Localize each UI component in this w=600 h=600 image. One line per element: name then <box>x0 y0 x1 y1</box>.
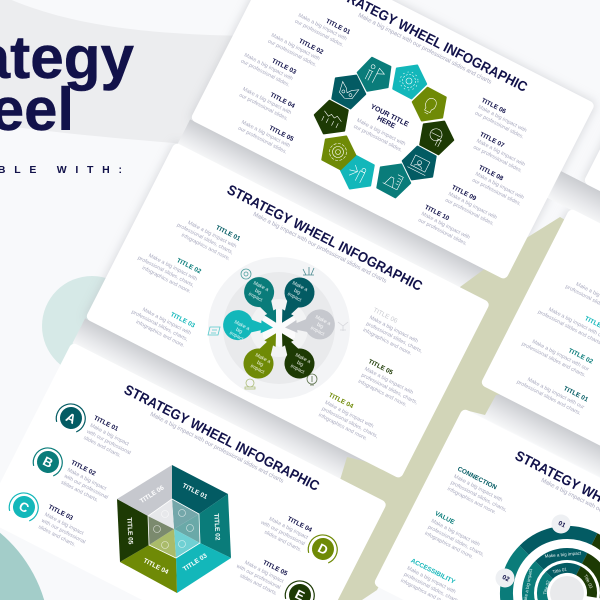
slide text: Make a big impact with <box>477 104 528 134</box>
petal labels: Make a <box>254 352 272 365</box>
slide text: STRATEGY WHEEL INFOGRAPHIC <box>122 381 322 494</box>
slide text: TITLE 09 <box>450 184 478 203</box>
petal labels: impact <box>309 325 326 338</box>
slide text: TITLE 02 <box>175 257 203 276</box>
slide text: Make a big impact with <box>363 366 414 396</box>
slide text: with our professional <box>235 563 281 591</box>
letter badges: D <box>315 540 331 558</box>
slide text: Make a big impact with <box>270 32 321 62</box>
slide text: infographics and more. <box>357 379 408 408</box>
petal labels: impact <box>289 363 306 376</box>
slide text: Make a big impact with <box>474 171 525 201</box>
slide text <box>212 0 573 261</box>
slide text: Make a big impact <box>43 512 85 537</box>
slide text: CONNECTION <box>456 466 498 492</box>
slide text: professional slides, charts, <box>360 372 418 406</box>
slide text: our professional slides. <box>472 144 523 174</box>
slide text: Make a big impact with our <box>531 339 590 373</box>
slide text: TITLE 03 <box>270 58 298 76</box>
slide text: Make a big impact with <box>356 118 406 147</box>
slide text: with our professional <box>63 473 109 501</box>
slide text: TITLE 05 <box>262 559 289 578</box>
slide text: professional slides, charts, <box>365 321 423 355</box>
slide text: infographics and more. <box>424 531 474 561</box>
slide text: TITLE 04 <box>286 516 313 534</box>
slide text: TITLE 03 <box>169 311 196 330</box>
ring labels: Title 02 <box>542 579 551 595</box>
slide text: Make a big impact with <box>368 315 419 345</box>
slide text: slides and charts. <box>37 524 76 548</box>
slide: hexagon wheel <box>0 342 387 600</box>
slide text: our professional slides. <box>267 39 318 68</box>
slide text: Make a big impact with <box>420 211 471 241</box>
slide text: professional slides, charts, <box>176 222 234 256</box>
slide text: slides and charts. <box>82 435 122 459</box>
hexagon labels: TITLE 05 <box>125 517 134 545</box>
petal labels: Make a <box>294 352 312 365</box>
petal labels: big <box>296 360 305 368</box>
letter badges: C <box>16 498 32 516</box>
petal labels: impact <box>228 330 245 343</box>
slide text: Make a big impact <box>66 467 108 492</box>
slide text: TITLE 05 <box>268 125 295 143</box>
slide text: Make a big impact with <box>297 13 348 42</box>
slide text: Make a big impact with <box>430 518 481 548</box>
hexagon inner segments <box>148 499 200 558</box>
slide text: our professional slides. <box>471 177 522 207</box>
ring labels: Make a big impact <box>544 550 582 559</box>
slide text: our professional slides. <box>240 58 291 88</box>
pentagon wheel <box>312 55 456 200</box>
slide text: Make a big impact with our professional slides and charts <box>149 412 284 485</box>
slide text: Make a big impact with <box>324 400 374 430</box>
slide text: professional slides, charts, <box>137 255 195 289</box>
slide: right side list <box>480 208 600 545</box>
slide text: our professional slides. <box>474 110 525 140</box>
slide text: professional slides and charts. <box>520 341 587 379</box>
slide text: our professional slides. <box>237 126 288 155</box>
slide text: our professional slides. <box>294 19 345 49</box>
slide text: YOUR TITLE <box>369 103 410 129</box>
slide: ten pentagon wheel <box>190 0 595 280</box>
small outer icons <box>208 267 348 389</box>
hexagon labels <box>125 482 221 576</box>
slide text: Make a big impact with <box>243 52 294 82</box>
slide text: infographics and more. <box>180 232 231 262</box>
ring labels <box>522 550 594 600</box>
number badges <box>496 514 570 588</box>
slide text: infographics and more. <box>141 265 192 295</box>
slide text: our professional slides. <box>444 197 495 227</box>
slide text: TITLE 04 <box>269 92 296 110</box>
slide text: with our professional <box>86 429 132 456</box>
slide text: infographics and more. <box>362 327 413 357</box>
slide text: TITLE 01 <box>324 18 352 36</box>
letter badges: A <box>63 409 79 427</box>
slide text: with our professional <box>260 520 306 547</box>
slide text: infographics and more. <box>317 412 368 442</box>
slide text: infographics and more. <box>446 486 497 516</box>
slide text: professional slides, charts, <box>130 309 189 343</box>
slide text: TITLE 03 <box>47 504 74 522</box>
petal labels: impact <box>249 363 266 376</box>
hexagon labels: TITLE 06 <box>139 484 166 505</box>
slide text: TITLE 02 <box>70 459 97 478</box>
slide text: infographics and more. <box>135 319 186 349</box>
petal labels: Make a <box>291 280 309 293</box>
slide text: Make a big impact with <box>406 565 457 595</box>
slide text: slides and charts. <box>60 480 99 504</box>
slide text: Make a big impact <box>243 560 285 585</box>
slide text: Make a big impact <box>89 423 130 448</box>
petal labels: big <box>235 327 244 335</box>
slide text: VALUE <box>434 510 456 526</box>
slide text: STRATEGY WHEEL INFOGRAPHIC <box>225 181 425 294</box>
slide text: TITLE 02 <box>567 347 594 366</box>
slide text: professional slides and charts. <box>516 379 582 417</box>
slide text: Make a big impact with our professional slides and charts <box>252 212 387 285</box>
petal labels: Make a <box>233 319 251 332</box>
slide text <box>37 375 335 600</box>
slide text: TITLE 06 <box>480 97 507 116</box>
concentric discs <box>208 257 350 399</box>
slide text: Make a big impact with <box>453 474 503 504</box>
letter badges: B <box>40 453 56 471</box>
number badges: 01 <box>557 520 567 530</box>
slide text: TITLE 07 <box>478 131 506 150</box>
hexagon labels: TITLE 03 <box>182 552 209 573</box>
slide text <box>504 264 600 417</box>
slide text: Make a big impact with <box>241 86 292 116</box>
ring chart <box>506 532 600 600</box>
petal labels: impact <box>247 291 264 304</box>
slide text: Make a big impact with our professional slides and charts <box>357 13 492 86</box>
slide text: Make a big impact <box>268 516 309 541</box>
slide: top right corner <box>583 6 600 343</box>
grey background band <box>0 0 260 150</box>
slide text <box>110 159 469 455</box>
slide text: TITLE 02 <box>297 38 325 56</box>
slide text: Make a big impact with <box>240 119 291 149</box>
slide: arrow wheel <box>85 142 490 479</box>
slide text: TITLE 10 <box>423 204 451 222</box>
hexagon labels: TITLE 01 <box>181 482 209 501</box>
slide text: Make a big impact with <box>447 191 498 221</box>
slide text: slides and charts. <box>263 529 303 553</box>
pentagon icons <box>320 64 446 190</box>
slide text: TITLE 01 <box>562 385 590 404</box>
petal labels <box>228 280 332 376</box>
slide text: slides and charts. <box>239 573 278 597</box>
slide text: TITLE 01 <box>214 224 242 243</box>
slide text: TITLE 01 <box>92 415 120 433</box>
hexagon inner icons <box>154 510 194 548</box>
letter badges <box>6 399 342 600</box>
hexagon labels: TITLE 02 <box>212 513 221 541</box>
petal labels: Make a <box>252 280 270 293</box>
arrow petals <box>222 272 336 384</box>
slide text: Make a big impact with <box>147 253 198 283</box>
slide text: Make a big impact with <box>475 138 526 168</box>
slide text: our professional slides. <box>417 217 468 247</box>
slide text: our professional slides. <box>352 124 403 154</box>
slide text: Make a big impact with <box>141 307 192 337</box>
slide: concentric ring wheel <box>373 408 600 600</box>
slide text: TITLE 05 <box>367 358 394 377</box>
slide text: TITLE 08 <box>477 164 505 183</box>
hexagon outer segments <box>117 465 231 593</box>
ring labels: Title 01 <box>552 566 568 574</box>
slide text <box>400 426 600 600</box>
petal labels: impact <box>286 291 303 304</box>
ring labels: Title 03 <box>583 574 594 589</box>
number badges: 02 <box>501 574 511 584</box>
large teal circle <box>0 500 50 600</box>
hexagon labels: TITLE 04 <box>142 557 170 576</box>
slide text: professional slides, charts, <box>449 480 508 514</box>
heading: Strategy Wheel <box>0 24 135 143</box>
pale teal circle <box>42 276 142 376</box>
slide text: ACCESSIBILITY <box>409 557 457 586</box>
slide text: professional slides, charts, <box>321 406 379 440</box>
petal labels: big <box>293 288 302 296</box>
slide text: Make a big impact with <box>187 220 237 250</box>
petal labels: Make a <box>314 314 332 327</box>
slide text: TITLE 06 <box>372 307 399 325</box>
petal labels: big <box>316 322 325 330</box>
slide text: Make a big impact with our <box>526 377 585 411</box>
slide text: our professional slides. <box>238 92 289 122</box>
olive background shape <box>330 217 600 600</box>
slide text: professional slides, charts, <box>427 524 485 558</box>
petal labels: big <box>254 288 263 296</box>
slide text: with our professional <box>40 518 86 545</box>
slide text: TITLE 04 <box>327 392 355 410</box>
slide text: HERE <box>376 115 397 130</box>
petal labels: big <box>256 360 265 368</box>
